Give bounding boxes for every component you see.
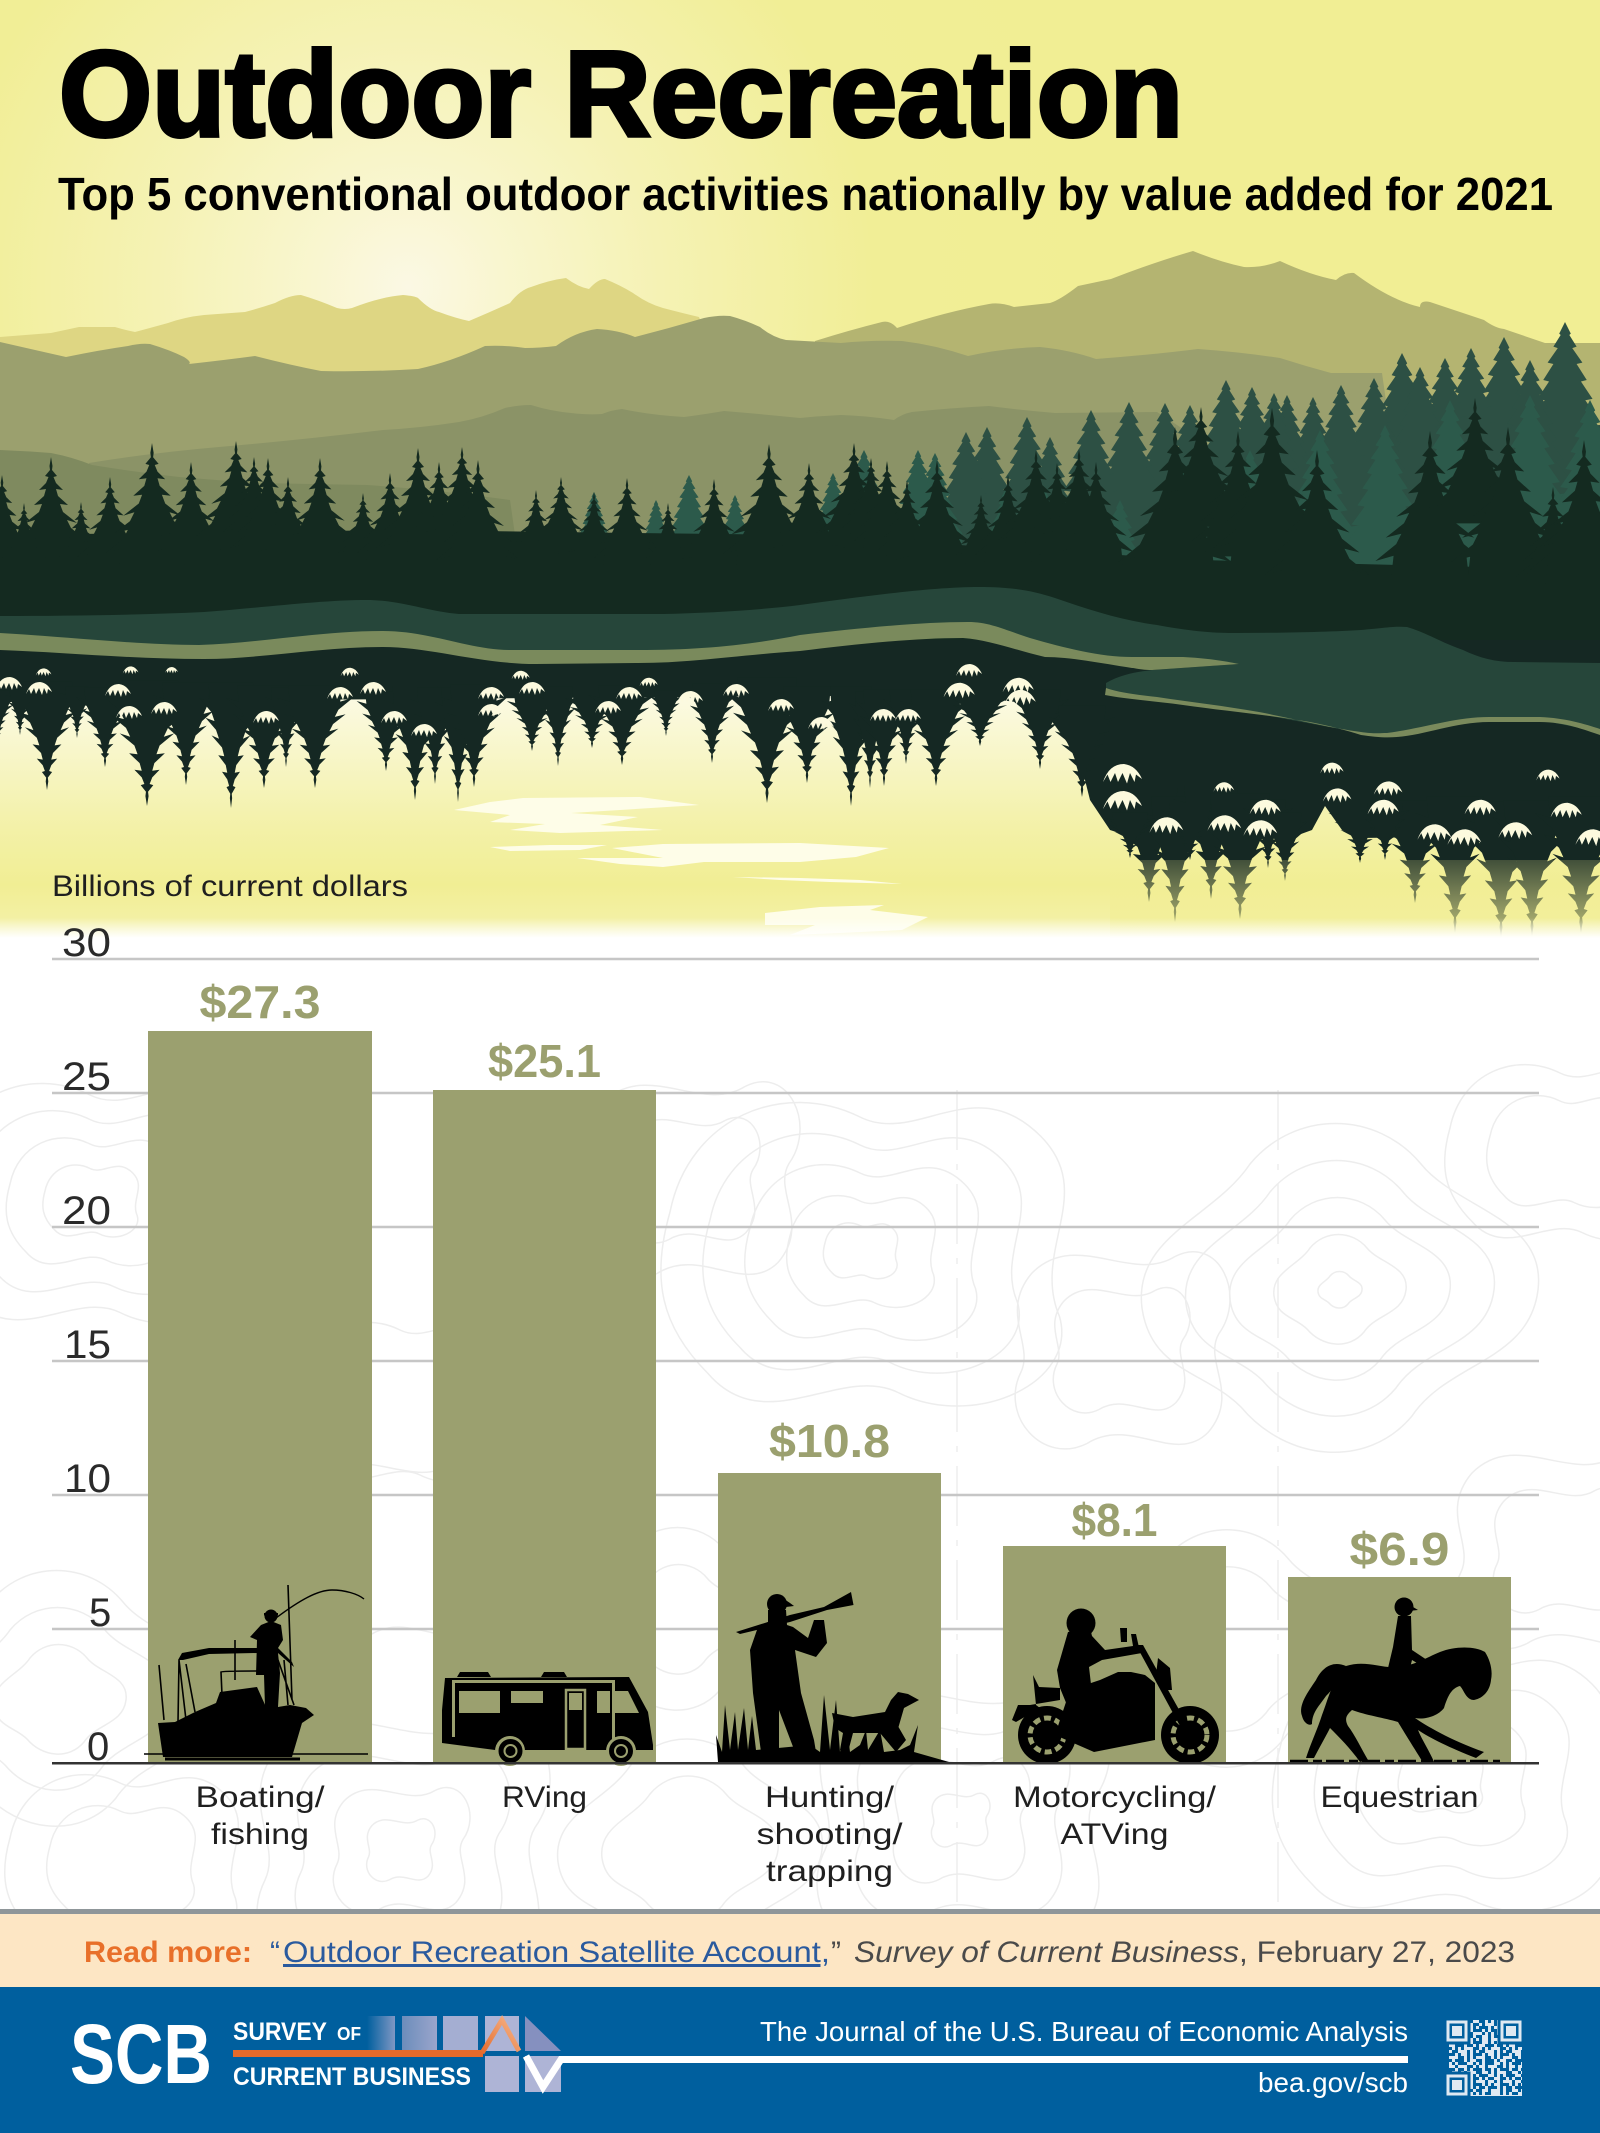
panel: read more citation: Read more: xyxy=(84,1936,252,1969)
category labels: fishing xyxy=(211,1818,309,1851)
logo: SCB: CURRENT BUSINESS xyxy=(233,2063,471,2091)
category labels xyxy=(196,1781,1478,1888)
url: bea.gov/scb xyxy=(1258,2067,1408,2098)
y axis labels: 30 xyxy=(62,921,111,965)
panel: read more citation: “ xyxy=(270,1936,280,1969)
teal mid forest xyxy=(574,395,1600,650)
panel: read more citation: Outdoor Recreation Satellite Account, xyxy=(283,1936,830,1969)
category labels: RVing xyxy=(502,1781,587,1814)
title: Outdoor Recreation xyxy=(59,26,1183,162)
panel: read more citation: ” xyxy=(831,1936,841,1969)
mountains: near ridge xyxy=(89,405,1200,570)
mountains: near left hill xyxy=(0,450,520,570)
olive shore strip, upper xyxy=(0,622,1239,670)
bar: hunting/shooting/trapping: $10.8 xyxy=(769,1415,890,1467)
y axis labels xyxy=(62,921,111,1769)
category labels: Boating/ xyxy=(196,1781,325,1814)
panel: read more citation xyxy=(0,1914,1600,1987)
logo: SCB: SURVEY xyxy=(233,2018,327,2046)
separator above the citation band xyxy=(0,1909,1600,1914)
panel: landscape scene xyxy=(0,0,1600,942)
category labels: shooting/ xyxy=(756,1818,903,1851)
lake water xyxy=(0,690,1600,940)
x axis baseline xyxy=(52,1762,1539,1764)
bar: hunting/shooting/trapping xyxy=(718,1415,941,1763)
y axis labels: 5 xyxy=(89,1591,111,1635)
icon: hunter and dog xyxy=(716,1592,949,1762)
fade from lake to white xyxy=(0,915,1600,942)
dark foreground forest xyxy=(0,398,1600,680)
category labels: trapping xyxy=(766,1855,893,1888)
y axis labels: 10 xyxy=(64,1457,111,1501)
panel: read more citation: , February 27, 2023 xyxy=(1239,1936,1515,1969)
lake shore band xyxy=(0,587,1600,735)
y axis labels: 25 xyxy=(62,1055,111,1099)
bar: RVing xyxy=(433,1035,656,1763)
light flecks in reflected forest xyxy=(0,664,1600,846)
category labels: Hunting/ xyxy=(765,1781,895,1814)
tagline: The Journal of the U.S. Bureau of Economic Analysis xyxy=(760,2016,1408,2047)
fade over low reflected trees xyxy=(1110,860,1600,940)
panel: footer xyxy=(0,1987,1600,2133)
reflected forest in lake xyxy=(0,640,1600,938)
bar chart xyxy=(52,870,1539,1888)
olive shore strip, lower xyxy=(1105,688,1600,737)
category labels: Motorcycling/ xyxy=(1013,1781,1217,1814)
y axis labels: 20 xyxy=(62,1189,111,1233)
mountains: middle ridge xyxy=(0,316,1400,560)
icon: motorcycle rider xyxy=(1012,1608,1219,1764)
bar: boating/fishing xyxy=(148,976,372,1763)
bar: motorcycling/ATVing: $8.1 xyxy=(1072,1494,1158,1546)
bar: RVing: $25.1 xyxy=(488,1035,601,1087)
panel: read more citation: Survey of Current Business xyxy=(854,1936,1239,1969)
logo: SCB xyxy=(70,2007,1408,2101)
logo: SCB: OF xyxy=(337,2024,361,2044)
QR code xyxy=(1445,2019,1523,2097)
category labels: Equestrian xyxy=(1320,1781,1478,1814)
category labels: ATVing xyxy=(1060,1818,1168,1851)
axis title: Billions of current dollars xyxy=(52,870,408,903)
sky with sun glow xyxy=(0,0,1600,720)
icon: RV motorhome xyxy=(442,1672,653,1766)
back forest xyxy=(820,322,1600,650)
bar: motorcycling/ATVing xyxy=(1003,1494,1226,1763)
bar: boating/fishing: $27.3 xyxy=(200,976,320,1028)
mountains: far right ridge xyxy=(815,251,1600,520)
topographic contour background xyxy=(0,1065,1600,1985)
icon: boat and fisherman xyxy=(144,1585,368,1759)
water highlights xyxy=(454,797,928,935)
y axis labels: 0 xyxy=(87,1725,109,1769)
bar: equestrian: $6.9 xyxy=(1350,1523,1450,1575)
bar: equestrian xyxy=(1288,1523,1511,1763)
y axis labels: 15 xyxy=(64,1323,111,1367)
subtitle: Top 5 conventional outdoor activities nationally by value added for 2021 xyxy=(58,168,1553,220)
gridlines xyxy=(52,959,1539,1629)
icon: horse and rider xyxy=(1290,1598,1500,1764)
mountains: far left ridge xyxy=(0,278,701,500)
logo: SCB: SCB xyxy=(70,2007,212,2101)
